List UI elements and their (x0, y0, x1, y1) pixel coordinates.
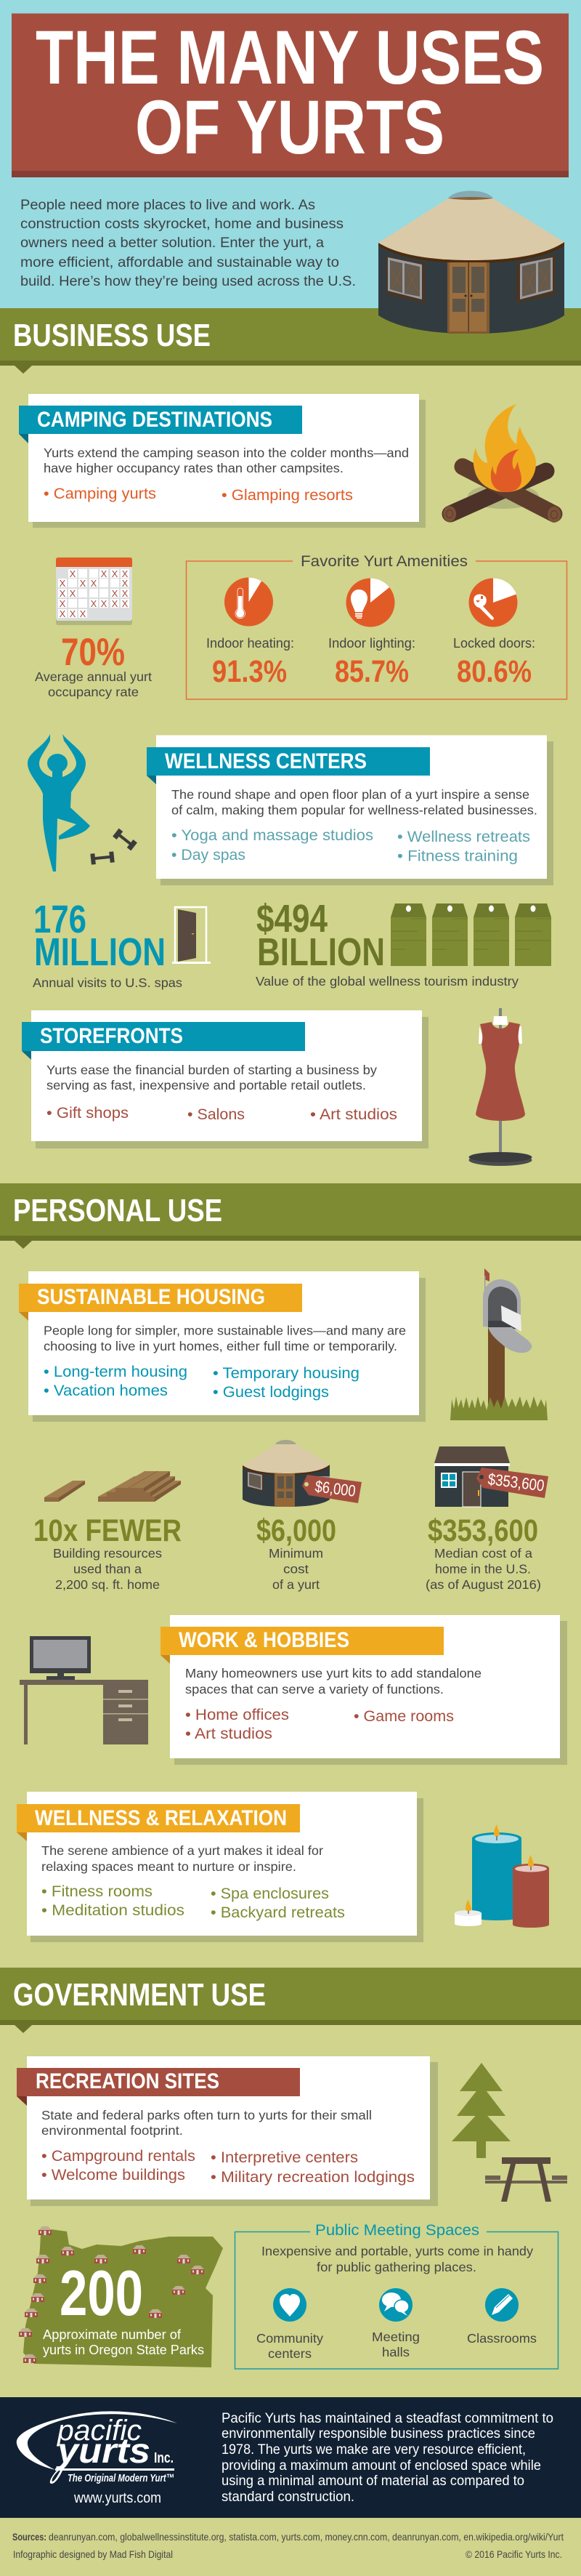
panel: sustainable housing: • Vacation homes (44, 1382, 168, 1399)
text block: company statement: Pacific Yurts has maintained a steadfast commitment to (222, 2411, 553, 2426)
icon: computer desk (20, 1636, 148, 1744)
stat: 494 billion: Value of the global wellness tourism industry (256, 974, 519, 989)
section band: business use (0, 308, 581, 374)
icon: pencil (485, 2288, 519, 2322)
price tag: 353,600: $353,600 (487, 1470, 545, 1494)
panel: wellness centers: • Wellness retreats (397, 829, 530, 845)
stat: 70 percent occupancy: occupancy rate (48, 685, 139, 699)
section band: personal use: PERSONAL USE (13, 1193, 222, 1228)
stat: 176 million: MILLION (34, 930, 166, 974)
panel: recreation sites: • Military recreation lodgings (211, 2169, 415, 2186)
intro paragraph: People need more places to live and work. As (20, 198, 315, 213)
panel: wellness and relaxation: The serene ambience of a yurt makes it ideal for (41, 1843, 323, 1858)
stat: 353,600 median cost: $353,600 (428, 1513, 538, 1548)
text block: company statement: standard construction. (222, 2490, 354, 2505)
pie: indoor heating (224, 577, 273, 627)
panel: favorite yurt amenities: 85.7% (335, 654, 409, 689)
text block: company statement (222, 2411, 553, 2505)
panel: recreation sites: • Campground rentals (41, 2148, 195, 2165)
stat: 353,600 median cost: Median cost of a (434, 1546, 532, 1561)
icon: calendar: X (70, 608, 76, 619)
panel: work and hobbies: • Home offices (185, 1707, 289, 1723)
panel: camping destinations: have higher occupancy rates than other campsites. (44, 461, 344, 475)
icon: candles (455, 1824, 549, 1928)
panel: work and hobbies: • Game rooms (354, 1708, 454, 1725)
panel: wellness centers: The round shape and open floor plan of a yurt inspire a sense (171, 787, 529, 802)
icon: heart (273, 2288, 306, 2322)
icon: picnic table (485, 2157, 567, 2202)
panel: work and hobbies: Many homeowners use yurt kits to add standalone (185, 1666, 482, 1681)
icon: calendar: X (122, 598, 129, 609)
icon: speech bubbles (379, 2288, 413, 2322)
icon: calendar: X (112, 568, 118, 579)
icon: house with price tag (434, 1446, 548, 1507)
icon: calendar: X (70, 588, 76, 599)
panel: work and hobbies: WORK & HOBBIES (179, 1628, 349, 1652)
panel: recreation sites: • Welcome buildings (41, 2167, 185, 2183)
icon: mailbox (450, 1268, 548, 1420)
stat: 176 million: 176 (33, 898, 86, 941)
panel: favorite yurt amenities: 80.6% (457, 654, 532, 689)
panel: favorite yurt amenities: Indoor heating: (206, 635, 294, 651)
stat: 353,600 median cost: home in the U.S. (435, 1561, 531, 1576)
title banner: OF YURTS (135, 85, 444, 170)
stat: 10x fewer: 2,200 sq. ft. home (55, 1577, 160, 1592)
icon: yurt markers (19, 2226, 204, 2363)
panel: favorite yurt amenities: Locked doors: (453, 635, 535, 651)
panel: storefronts: serving as fast, inexpensive and portable retail outlets. (46, 1078, 366, 1092)
intro paragraph: owners need a better solution. Enter the yurt, a (20, 236, 324, 251)
sources and credits (12, 2531, 564, 2560)
icon: calendar: X (101, 568, 107, 579)
panel: favorite yurt amenities: Indoor lighting: (328, 635, 415, 651)
icon: dress on mannequin (469, 1008, 532, 1166)
stat: 176 million: Annual visits to U.S. spas (33, 975, 182, 990)
icon: calendar (56, 558, 132, 625)
stat: 70 percent occupancy (35, 631, 152, 699)
panel: public meeting spaces: Community (256, 2331, 323, 2346)
panel: favorite yurt amenities: 91.3% (212, 654, 287, 689)
panel: public meeting spaces: Meeting (372, 2330, 420, 2344)
stat: 10x fewer: 10x FEWER (33, 1513, 182, 1548)
panel: public meeting spaces: Inexpensive and portable, yurts come in handy (261, 2244, 533, 2258)
logo: pacific yurts: yurts (56, 2432, 150, 2471)
icon: campfire (443, 404, 561, 523)
panel: sustainable housing: • Temporary housing (213, 1365, 359, 1382)
price tag: 353,600 (476, 1468, 548, 1498)
panel: wellness and relaxation: • Meditation studios (41, 1902, 184, 1919)
panel: public meeting spaces: halls (382, 2345, 410, 2359)
intro paragraph (20, 198, 356, 289)
stat: 10x fewer (33, 1513, 182, 1592)
section band: government use (0, 1968, 581, 2033)
panel: recreation sites: State and federal parks often turn to yurts for their small (41, 2108, 372, 2122)
illustration: yurt (378, 190, 564, 334)
icon: calendar: X (101, 598, 107, 609)
text block: company statement: environmentally responsible business practices since (222, 2426, 535, 2442)
panel: wellness and relaxation: • Backyard retreats (211, 1904, 345, 1921)
panel: camping destinations: CAMPING DESTINATIONS (37, 408, 272, 432)
icon: calendar: X (91, 598, 97, 609)
icon: calendar: X (80, 578, 86, 589)
panel: wellness centers: of calm, making them popular for wellness-related businesses. (171, 802, 537, 817)
section band: personal use (0, 1183, 581, 1249)
stat: 494 billion (256, 897, 551, 989)
panel: storefronts: STOREFRONTS (40, 1024, 183, 1048)
panel: favorite yurt amenities: Favorite Yurt Amenities (301, 553, 468, 570)
icon: calendar: X (91, 578, 97, 589)
panel: storefronts: • Gift shops (46, 1105, 129, 1122)
panel: sustainable housing: People long for simpler, more sustainable lives—and many are (44, 1323, 406, 1337)
stat: 10x fewer: used than a (73, 1561, 142, 1576)
icon: money tags (391, 903, 551, 966)
footer band (0, 2397, 581, 2518)
panel: wellness and relaxation: relaxing spaces meant to nurture or inspire. (41, 1859, 296, 1874)
stat: 176 million (33, 898, 211, 990)
panel: recreation sites: environmental footprint. (41, 2123, 183, 2138)
panel: public meeting spaces: Public Meeting Spaces (315, 2222, 479, 2239)
icon: calendar: X (80, 608, 86, 619)
text block: company statement: providing a maximum amount of enclosed space while (222, 2458, 541, 2474)
panel: storefronts: • Salons (187, 1106, 245, 1123)
stat: 70 percent occupancy: 70% (61, 631, 125, 674)
stat: 353,600 median cost (426, 1513, 541, 1592)
logo: pacific yurts: The Original Modern Yurt™ (68, 2472, 174, 2484)
panel: wellness centers: WELLNESS CENTERS (165, 749, 367, 773)
sources and credits: © 2016 Pacific Yurts Inc. (466, 2548, 562, 2560)
stat: 70 percent occupancy: Average annual yurt (35, 669, 152, 684)
icon: calendar: X (122, 588, 129, 599)
stat: 6,000 minimum cost (256, 1513, 336, 1592)
icon: calendar: X (60, 578, 66, 589)
intro paragraph: build. Here’s how they’re being used across the U.S. (20, 274, 356, 289)
panel: wellness and relaxation: • Spa enclosures (211, 1885, 329, 1902)
icon: calendar: X (70, 568, 76, 579)
panel: public meeting spaces: Classrooms (467, 2331, 537, 2346)
stat: 494 billion: BILLION (257, 930, 385, 974)
pie: locked doors (469, 578, 517, 627)
panel: sustainable housing: • Guest lodgings (213, 1384, 329, 1401)
intro paragraph: more efficient, affordable and sustainable way to (20, 255, 339, 270)
panel: work and hobbies (161, 1615, 567, 1765)
icon: pine tree (452, 2063, 511, 2158)
section band: government use: GOVERNMENT USE (13, 1977, 266, 2013)
panel: storefronts (22, 1010, 428, 1148)
panel: sustainable housing: SUSTAINABLE HOUSING (37, 1285, 265, 1309)
stat: 353,600 median cost: (as of August 2016) (426, 1577, 541, 1592)
panel: camping destinations: Yurts extend the camping season into the colder months—and (44, 446, 409, 460)
icon: calendar: X (112, 598, 118, 609)
icon: lumber (44, 1471, 181, 1502)
section band: business use: BUSINESS USE (13, 318, 211, 353)
logo: pacific yurts (17, 2411, 177, 2506)
panel: wellness centers: • Day spas (171, 847, 245, 864)
icon: calendar: X (60, 598, 66, 609)
panel: wellness and relaxation (17, 1792, 423, 1942)
icon: calendar: X (112, 588, 118, 599)
panel: camping destinations: • Camping yurts (44, 486, 156, 502)
pie: indoor lighting (346, 578, 395, 627)
icon: yoga figure with dumbbells (28, 734, 137, 872)
stat: 6,000 minimum cost: Minimum (269, 1546, 323, 1561)
logo: pacific yurts: pacific (57, 2415, 142, 2447)
panel: storefronts: Yurts ease the financial burden of starting a business by (46, 1063, 377, 1077)
icon: open door (172, 907, 211, 964)
panel: sustainable housing: • Long-term housing (44, 1364, 187, 1380)
panel: camping destinations: • Glamping resorts (222, 487, 353, 504)
panel: wellness centers: • Fitness training (397, 848, 518, 865)
icon: calendar: X (60, 588, 66, 599)
map: oregon state parks (19, 2226, 223, 2367)
sources and credits: Sources: (12, 2531, 46, 2543)
panel: work and hobbies: • Art studios (185, 1726, 272, 1742)
stat: 6,000 minimum cost: of a yurt (272, 1577, 320, 1592)
icon: small yurt with price tag (243, 1440, 362, 1507)
price tag: 6,000: $6,000 (314, 1477, 357, 1500)
panel: wellness and relaxation: • Fitness rooms (41, 1883, 153, 1900)
panel: wellness and relaxation: WELLNESS & RELAXATION (35, 1806, 287, 1830)
icon: calendar: X (60, 608, 66, 619)
panel: favorite yurt amenities (186, 553, 566, 699)
map: oregon state parks: 200 (60, 2257, 143, 2329)
panel: public meeting spaces: for public gathering places. (317, 2260, 476, 2274)
panel: public meeting spaces: centers (268, 2346, 312, 2361)
stat: 494 billion: $494 (256, 897, 328, 941)
logo: pacific yurts: www.yurts.com (73, 2490, 161, 2506)
title banner (12, 13, 569, 177)
intro paragraph: construction costs skyrocket, home and business (20, 217, 344, 232)
panel: wellness centers (147, 736, 553, 885)
panel: recreation sites: • Interpretive centers (211, 2149, 358, 2166)
map: oregon state parks: Approximate number of (43, 2327, 182, 2342)
panel: work and hobbies: spaces that can serve a variety of functions. (185, 1682, 444, 1696)
panel: public meeting spaces (235, 2222, 558, 2369)
map: oregon state parks: yurts in Oregon State Parks (43, 2343, 204, 2357)
panel: recreation sites: RECREATION SITES (36, 2069, 219, 2093)
panel: wellness centers: • Yoga and massage studios (171, 827, 373, 844)
icon: calendar: X (122, 578, 129, 589)
panel: sustainable housing (19, 1271, 426, 1422)
icon: calendar: X (122, 568, 129, 579)
stat: 6,000 minimum cost: $6,000 (256, 1513, 336, 1548)
panel: camping destinations (19, 394, 426, 528)
panel: recreation sites (17, 2056, 438, 2206)
price tag: 6,000 (302, 1475, 362, 1503)
text block: company statement: 1978. The yurts we make are very resource efficient, (222, 2442, 526, 2458)
stat: 10x fewer: Building resources (53, 1546, 162, 1561)
logo: pacific yurts: Inc. (154, 2450, 174, 2466)
sources and credits: Infographic designed by Mad Fish Digital (13, 2548, 173, 2560)
panel: storefronts: • Art studios (310, 1106, 397, 1123)
panel: sustainable housing: choosing to live in yurt homes, either full time or temporarily. (44, 1339, 397, 1353)
stat: 6,000 minimum cost: cost (283, 1561, 309, 1576)
text block: company statement: using a minimal amount of material as compared to (222, 2474, 524, 2489)
